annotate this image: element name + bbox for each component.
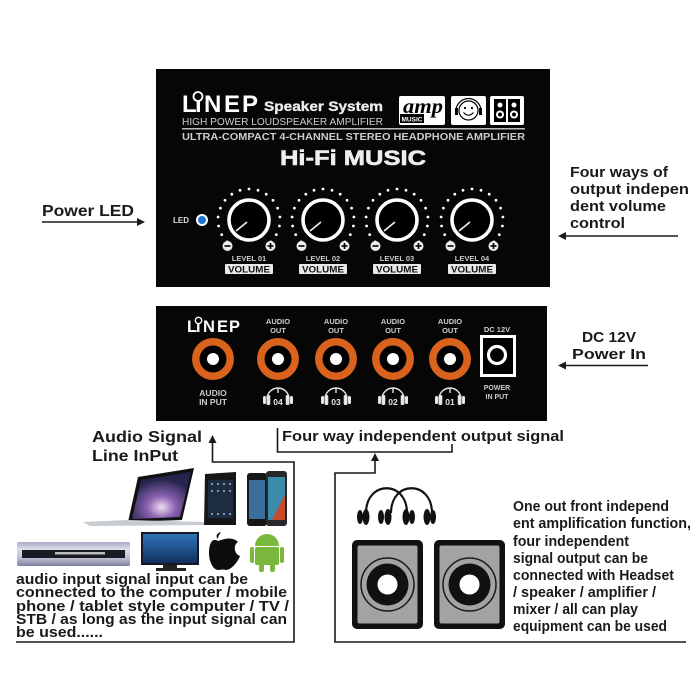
text block: output description: ent amplification function, [513, 516, 691, 532]
text block: output description: signal output can be [513, 551, 648, 567]
text block: output description: / speaker / amplifier / [513, 585, 656, 601]
subheading: ultra-compact: ULTRA-COMPACT 4-CHANNEL STEREO HEADPHONE AMPLIFIER [182, 132, 526, 143]
brand logo: LINEP: LiNEP [182, 91, 258, 118]
icon: tablet [204, 472, 236, 525]
knob: level 01: LEVEL 01 [232, 254, 266, 263]
port: audio out 01 [433, 317, 467, 407]
callout: volume control [558, 164, 689, 240]
port: audio out 03: OUT [328, 326, 344, 335]
text block: output description: mixer / all can play [513, 602, 638, 618]
text block: output description: connected with Headset [513, 568, 674, 584]
icon: smartphones [247, 471, 287, 526]
icon: headphones [357, 488, 436, 525]
port: audio out 04 [261, 317, 295, 407]
badge: speakers [490, 96, 524, 125]
knob: level 04: LEVEL 04 [455, 254, 490, 263]
text block: output description [513, 499, 691, 635]
knob: level 03 [365, 188, 429, 274]
text block: audio input description [16, 571, 290, 641]
icon: laptop [83, 468, 205, 526]
port: audio out 04: AUDIO [266, 317, 290, 326]
port: audio out 03: 03 [331, 397, 341, 407]
port: audio out 03 [319, 317, 353, 407]
text block: audio input description: be used...... [16, 624, 103, 641]
arrow: output signal connector [335, 453, 686, 642]
LED indicator: LED [173, 216, 189, 225]
heading: Hi-Fi MUSIC: Hi-Fi MUSIC [280, 147, 426, 170]
port: audio out 02: OUT [385, 326, 401, 335]
panel: amplifier front [156, 69, 550, 287]
port: audio input [196, 342, 230, 407]
badge: smiley with headphones [451, 96, 486, 125]
knob: level 02: VOLUME [302, 264, 344, 274]
port: audio out 02 [376, 317, 410, 407]
port: audio out 04: 04 [273, 397, 283, 407]
text block: output description: equipment can be used [513, 619, 667, 635]
icon: left speaker [352, 540, 423, 629]
arrow: audio input connector [16, 435, 294, 642]
port: audio out 01: AUDIO [438, 317, 462, 326]
callout: Power LED [42, 203, 145, 226]
callout: DC 12V power in: Power In [572, 346, 646, 363]
callout: Power LED: Power LED [42, 203, 134, 220]
port: DC power input: POWER [484, 385, 510, 392]
knob: level 02 [291, 188, 355, 274]
port: audio out 02: 02 [388, 397, 398, 407]
callout: volume control: dent volume [570, 198, 666, 215]
text block: audio input description: audio input signal input can be [16, 571, 248, 588]
callout: volume control: output indepen [570, 181, 689, 198]
text block: audio input description: phone / tablet style computer / TV / [16, 598, 290, 615]
port: audio out 04: OUT [270, 326, 286, 335]
callout: DC 12V power in: DC 12V [582, 329, 636, 346]
heading: Audio Signal Line InPut: Line InPut [92, 448, 179, 465]
text block: output description: One out front independ [513, 499, 669, 515]
icon: right speaker [434, 540, 505, 629]
icon: android logo [250, 534, 284, 572]
panel: amplifier back [156, 306, 547, 421]
port: audio out 03: AUDIO [324, 317, 348, 326]
port: DC power input: IN PUT [486, 394, 509, 401]
knob: level 04: VOLUME [451, 264, 493, 274]
text block: audio input description: connected to the computer / mobile [16, 584, 287, 601]
port: DC power input: DC 12V [484, 325, 510, 334]
heading: four way output signal: Four way independent output signal [282, 428, 564, 445]
port: audio input: IN PUT [199, 397, 228, 407]
heading: Audio Signal Line InPut [92, 429, 202, 465]
badge: amp music [399, 96, 445, 125]
knob: level 01: VOLUME [228, 264, 270, 274]
port: DC power input [482, 325, 514, 401]
callout: volume control: Four ways of [570, 164, 669, 181]
knob: level 01 [217, 188, 281, 274]
callout: DC 12V power in [558, 329, 648, 370]
port: audio out 02: AUDIO [381, 317, 405, 326]
knob: level 03: VOLUME [376, 264, 418, 274]
icon: TV [141, 532, 199, 571]
port: audio out 01: OUT [442, 326, 458, 335]
divider under subheading [182, 128, 525, 130]
port: audio out 01: 01 [445, 397, 455, 407]
badge: amp music: MUSIC [402, 116, 423, 124]
callout: volume control: control [570, 215, 625, 232]
heading: Audio Signal Line InPut: Audio Signal [92, 429, 202, 446]
subheading: high power amplifier: HIGH POWER LOUDSPEAKER AMPLIFIER [182, 116, 383, 128]
badge: amp music: amp [403, 96, 443, 118]
text block: output description: four independent [513, 534, 629, 550]
knob: level 02: LEVEL 02 [306, 254, 340, 263]
knob: level 04 [440, 188, 504, 274]
heading: Speaker System: Speaker System [264, 99, 383, 114]
text block: audio input description: STB / as long as the input signal can [16, 611, 287, 628]
icon: set-top box [17, 542, 130, 566]
bracket: output signal [278, 428, 452, 452]
brand logo: LINEP: LiNEP [187, 318, 240, 336]
port: audio input: AUDIO [199, 388, 227, 398]
knob: level 03: LEVEL 03 [380, 254, 414, 263]
icon: apple logo [209, 532, 240, 570]
LED indicator [173, 215, 207, 225]
